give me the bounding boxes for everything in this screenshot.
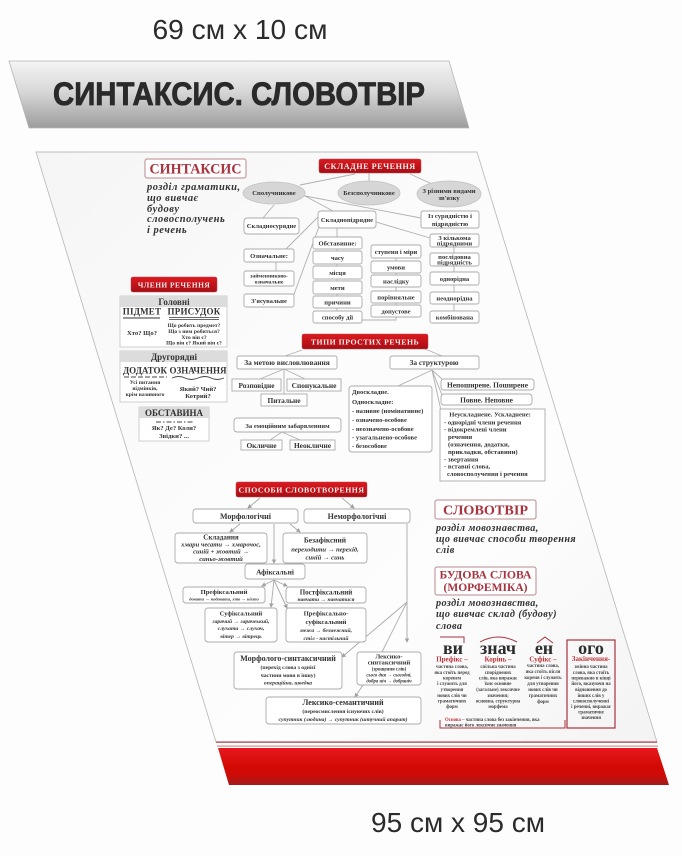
morpheme: root: спільна частина	[480, 665, 516, 670]
morpheme: root	[476, 637, 521, 710]
morpheme: prefix	[434, 637, 470, 710]
box: Неускладнене. Ускладнене	[440, 409, 545, 481]
definition: syntax: словосполучень	[147, 214, 225, 225]
box: Неускладнене. Ускладнене: (означення, додатки,	[448, 442, 510, 448]
box: однорідна	[430, 272, 479, 285]
oval: З різними видами зв'язку: З різними видами	[422, 188, 476, 195]
box: послідовна підрядність	[430, 253, 479, 266]
size label: top banner: 69 см х 10 см	[152, 14, 328, 45]
box: Безафіксний: переходити → перехід,	[291, 546, 359, 554]
definition: morphemics	[435, 598, 557, 632]
box: За емоційним забарвленням	[234, 418, 341, 432]
box: structure types list: - називне (номінативне)	[352, 408, 423, 415]
box: structure types list: - означено-особове	[352, 417, 407, 424]
box: умови	[371, 261, 421, 273]
size label: main panel: 95 см х 95 см	[371, 807, 545, 838]
box: Префіксально-суфіксальний	[286, 608, 366, 642]
morpheme: prefix: граматичних	[438, 700, 467, 704]
box: умови: умови	[387, 264, 405, 272]
box: неоднорідна	[430, 292, 479, 304]
morpheme: prefix: ви	[443, 638, 463, 658]
box: ступеня і міри	[371, 245, 421, 258]
box: structure types list: - неозначено-особове	[352, 426, 414, 433]
box: Складнопідрядне	[318, 211, 376, 228]
box: Безафіксний: синій → синь	[306, 554, 344, 562]
box: Неускладнене. Ускладнене: - звертання	[444, 456, 479, 464]
box: Префіксально-суфіксальний: суфіксальний	[306, 619, 347, 626]
box: Неускладнене. Ускладнене: Неускладнене. Ускладнене:	[449, 412, 531, 418]
definition: word formation	[435, 523, 576, 556]
morpheme: prefix: утворення	[441, 688, 464, 693]
box: Складнопідрядне: Складнопідрядне	[321, 217, 373, 224]
definition: syntax: що вивчає	[147, 193, 199, 204]
box: Лексико-синтаксичний: сього дня → сьогодні,	[366, 674, 412, 678]
box: З кількома підрядними	[430, 234, 479, 248]
predicate column: ПРИСУДОК	[168, 306, 221, 316]
subject column: Хто? Що?	[127, 330, 157, 337]
morpheme: prefix: коренем	[443, 676, 462, 682]
morpheme: suffix: для утворення	[527, 682, 559, 687]
box: Постфіксальний: Постфіксальний	[300, 588, 352, 596]
morpheme: prefix: Префікс –	[436, 656, 468, 664]
box: Означальне	[244, 249, 294, 262]
panel: secondary sentence parts	[120, 351, 227, 402]
oval: Сполучникове: Сполучникове	[252, 190, 296, 197]
box: ступеня і міри: ступеня і міри	[375, 249, 417, 256]
box: З'ясувальне	[244, 294, 294, 307]
box: Префіксально-суфіксальний: межа → безмежний,	[299, 627, 352, 634]
main panel	[36, 152, 669, 785]
box: часу	[313, 251, 362, 264]
object column: крім називного	[126, 392, 165, 398]
definition: syntax: і речень	[147, 225, 187, 236]
box: місця: місця	[329, 270, 346, 277]
connector lines: complex sentence	[263, 173, 454, 320]
definition: morphemics: слова	[436, 621, 462, 632]
box: Складання: синій + жовтий →	[193, 548, 249, 556]
box: Морфолого-синтаксичний: (перехід слова з однієї	[261, 664, 316, 671]
morpheme: suffix: кореня і служить	[524, 676, 562, 681]
morpheme: suffix: ен	[535, 638, 553, 658]
box: займенниково-означальне: означальне	[255, 280, 284, 286]
box: Непоширене. Поширене: Непоширене. Поширене	[447, 380, 529, 390]
morpheme: root: споріднених	[485, 671, 512, 676]
box: Афіксальні: Афіксальні	[256, 568, 294, 576]
definition: syntax: будову	[147, 204, 180, 215]
box: допустове	[371, 305, 421, 317]
box: комбінована: комбінована	[436, 314, 474, 322]
oval: Сполучникове	[243, 182, 305, 204]
box: structure types list: - узагальнено-особове	[352, 434, 417, 442]
box: Розповідне	[232, 379, 281, 391]
box: наслідку	[371, 275, 421, 287]
box: Постфіксальний	[286, 587, 366, 603]
box: Неокличне: Неокличне	[294, 441, 332, 450]
morpheme: suffix: Суфікс –	[529, 656, 557, 664]
morpheme: prefix: частина слова,	[436, 665, 469, 670]
morpheme: suffix: яка стоїть після	[526, 670, 561, 675]
predicate column: Що з ним робиться?	[168, 328, 220, 335]
header: Члени речення: ЧЛЕНИ РЕЧЕННЯ	[138, 280, 210, 290]
attribute column: Котрий?	[185, 393, 211, 400]
header: Типи простих речень: ТИПИ ПРОСТИХ РЕЧЕНЬ	[311, 338, 419, 346]
definition: word formation: розділ мовознавства,	[435, 523, 539, 534]
morpheme: ending: слова, яка стоїть	[573, 671, 610, 676]
box: Неморфологічні	[304, 509, 410, 523]
morpheme: root: Корінь –	[484, 656, 512, 664]
box: способу дії: способу дії	[322, 314, 353, 322]
oval: Безсполучникове: Безсполучникове	[343, 190, 395, 197]
box: Розповідне: Розповідне	[238, 381, 275, 390]
box: Окличне	[241, 440, 282, 450]
box: structure types list: Двоскладне.	[352, 389, 389, 396]
header: Способи словотворення	[236, 482, 367, 497]
box: Неускладнене. Ускладнене: - однорідні члени речення	[444, 420, 522, 426]
box: Префіксально-суфіксальний: стіл - настільний	[304, 635, 348, 642]
box: Морфолого-синтаксичний: частини мови в іншу)	[261, 672, 316, 679]
oval: З різними видами зв'язку: зв'язку	[438, 195, 460, 202]
morpheme: ending: значення	[581, 716, 601, 721]
box: За структурою	[390, 356, 479, 369]
box: Суфіксальний: вітер → вітрець	[220, 634, 262, 640]
morpheme: root: знач	[480, 638, 516, 658]
header: Типи простих речень	[302, 334, 428, 349]
predicate column: Хто він є?	[181, 335, 207, 341]
box: Безафіксний: Безафіксний	[304, 536, 347, 544]
morpheme: prefix: нових слів чи	[437, 694, 467, 699]
box: допустове: допустове	[381, 308, 411, 316]
morpheme: suffix	[524, 637, 562, 705]
box: Неускладнене. Ускладнене: словосполучення і речення	[447, 471, 528, 478]
predicate column: Що робить предмет?	[168, 322, 221, 329]
box: structure types list: - безособове	[352, 443, 387, 450]
box: Постфіксальний: навчати → навчатися	[298, 597, 355, 603]
box: Лексико-синтаксичний: (зрощення слів)	[372, 668, 407, 672]
box: Лексико-синтаксичний: добра ніч → добраніч	[366, 680, 412, 684]
subject column	[123, 306, 161, 337]
morpheme: ending: ого	[578, 638, 604, 658]
object column: ДОДАТОК	[123, 366, 167, 376]
box: Лексико-синтаксичний	[357, 652, 421, 685]
heading: Будова слова (морфеміка): (МОРФЕМІКА)	[444, 582, 528, 594]
attribute column: Який? Чий?	[180, 386, 216, 393]
morpheme: prefix: форм	[446, 705, 459, 710]
box: Префіксальний: довати → подавати, хто → ніхто	[189, 596, 259, 602]
box: Лексико-синтаксичний: синтаксичний	[368, 660, 411, 666]
box: часу: часу	[331, 255, 345, 262]
attribute column	[170, 366, 227, 400]
header: Члени речення	[131, 277, 217, 292]
box: Префіксальний: Префіксальний	[201, 589, 248, 596]
decorative stripes and red footer band	[216, 742, 669, 785]
definition: morphemics: розділ мовознавства,	[435, 598, 539, 609]
box: Морфолого-синтаксичний: Морфолого-синтаксичний	[240, 654, 336, 663]
box: Суфіксальний: гарячий → гарячеький,	[213, 618, 269, 625]
box: З кількома підрядними: підрядними	[437, 240, 472, 248]
morpheme: ending: переважно в кінці	[571, 676, 611, 682]
box: Неускладнене. Ускладнене: - відокремлені члени	[444, 426, 507, 434]
top banner	[9, 61, 469, 128]
box: Суфіксальний: слухати → слухач,	[218, 626, 264, 632]
box: Лексико-семантичний	[266, 697, 421, 724]
box: порівняльне: порівняльне	[377, 294, 415, 302]
box: однорідна: однорідна	[440, 276, 470, 283]
box: Складання: синьо-жовтий	[199, 556, 243, 563]
morpheme: prefix: і служить для	[437, 682, 467, 687]
box: Афіксальні	[245, 564, 305, 579]
morpheme: suffix: форм	[537, 700, 550, 705]
morpheme: root: їхнє основне	[485, 682, 511, 687]
box: Із сурядністю і підрядністю	[421, 211, 479, 228]
heading: Синтаксис: СИНТАКСИС	[150, 162, 242, 178]
morpheme: ending	[567, 638, 615, 728]
object column: відмінків,	[132, 386, 158, 392]
connector lines: simple sentence types	[260, 349, 442, 440]
definition: word formation: що вивчає способи творення	[436, 534, 576, 545]
panel: main sentence parts	[120, 296, 227, 347]
panel: adverbial	[139, 407, 209, 441]
adverbial questions: Звідки? ...	[159, 433, 189, 440]
morpheme: ending: інших слів у	[578, 694, 605, 699]
box: порівняльне	[371, 291, 421, 303]
heading: Словотвір: СЛОВОТВІР	[443, 504, 528, 518]
box: Неускладнене. Ускладнене: - вставні слова,	[444, 464, 490, 470]
box: Обставинне: Обставинне:	[318, 240, 357, 248]
word stem note	[440, 718, 565, 728]
word stem note: Основа – частина слова без закінчення, яка	[445, 718, 540, 723]
heading: Будова слова (морфеміка)	[435, 567, 536, 595]
box: Питальне	[261, 394, 307, 406]
box: Спонукальне	[287, 379, 341, 391]
morpheme: suffix: частина слова,	[527, 664, 560, 669]
morpheme: ending: Закінчення-	[572, 655, 611, 663]
predicate column	[166, 306, 222, 346]
box: Лексико-семантичний: Лексико-семантичний	[302, 698, 384, 707]
box: мети: мети	[330, 285, 345, 292]
box: За структурою: За структурою	[409, 358, 459, 367]
subject column: ПІДМЕТ	[123, 306, 161, 316]
morpheme: ending: словосполученні	[573, 700, 610, 704]
box: Префіксально-суфіксальний: Префіксально-	[304, 610, 348, 618]
box: Морфолого-синтаксичний	[234, 652, 342, 689]
box: Складносурядне: Складносурядне	[247, 223, 296, 230]
box: місця	[313, 266, 362, 279]
morpheme: ending: відношення до	[575, 688, 608, 693]
morpheme: ending: його, вказуючи на	[571, 682, 611, 687]
definition: morphemics: що вивчає склад (будову)	[436, 609, 557, 620]
heading: Будова слова (морфеміка): БУДОВА СЛОВА	[440, 570, 532, 582]
header: Способи словотворення: СПОСОБИ СЛОВОТВОРЕННЯ	[239, 486, 364, 494]
box: Суфіксальний	[205, 608, 277, 642]
oval: Безсполучникове	[338, 181, 400, 205]
box: Спонукальне: Спонукальне	[292, 381, 337, 390]
definition: word formation: слів	[436, 545, 455, 556]
object column: Усі питання	[130, 380, 160, 386]
object column	[123, 366, 167, 398]
box: За емоційним забарвленням: За емоційним забарвленням	[245, 423, 330, 430]
morpheme: suffix: граматичних	[529, 694, 558, 699]
morpheme: root: слів, яка виражає	[479, 676, 518, 682]
box: причини	[313, 296, 362, 308]
banner title: СИНТАКСИС. СЛОВОТВІР	[53, 76, 425, 112]
box: Морфологічні: Морфологічні	[220, 512, 272, 521]
box: Лексико-семантичний: супутник (людина) → супутник (штучний апарат)	[279, 716, 408, 723]
attribute column: ОЗНАЧЕННЯ	[170, 366, 227, 376]
connector arrows: word formation	[230, 498, 407, 697]
box: Морфолого-синтаксичний: операційна, шведка	[264, 680, 312, 686]
box: Безафіксний	[283, 533, 367, 563]
box: Лексико-синтаксичний: Лексико-	[375, 654, 403, 660]
box: неоднорідна: неоднорідна	[436, 296, 473, 302]
box: займенниково-означальне	[244, 271, 294, 286]
box: Складання: Складання	[203, 534, 239, 542]
morpheme: ending: і реченні, виражає	[571, 705, 612, 710]
box: Із сурядністю і підрядністю: Із сурядністю і	[428, 213, 472, 220]
header: Складне речення: СКЛАДНЕ РЕЧЕННЯ	[324, 162, 416, 171]
morpheme: root: (загальне) лексичне	[476, 688, 520, 693]
oval: З різними видами зв'язку	[417, 181, 481, 207]
box: Морфологічні	[193, 509, 298, 523]
box: Неморфологічні: Неморфологічні	[328, 512, 387, 521]
panel header: Обставина: ОБСТАВИНА	[145, 408, 203, 418]
box: Складання: хмари чесати → хмарочос,	[180, 542, 261, 548]
box: Неускладнене. Ускладнене: речення	[448, 434, 473, 441]
morpheme: ending: граматичне	[578, 710, 604, 716]
box: Повне. Неповне	[441, 394, 532, 405]
panel header: Другорядні: Другорядні	[151, 352, 198, 362]
box: послідовна підрядність: підрядність	[437, 260, 472, 266]
predicate column: Що він є? Який він є?	[166, 340, 222, 346]
box: послідовна підрядність: послідовна	[438, 254, 472, 261]
box: Префіксальний	[183, 587, 265, 603]
box: Окличне: Окличне	[246, 441, 277, 450]
panel header: Головні: Головні	[158, 297, 190, 307]
morpheme: suffix: нових слів чи	[528, 688, 558, 693]
box: За метою висловлювання: За метою висловлювання	[244, 358, 330, 367]
box: За метою висловлювання	[237, 356, 337, 369]
morpheme: ending: змінна частина	[574, 665, 608, 670]
box: комбінована	[430, 311, 479, 323]
morpheme: root: значення;	[487, 694, 509, 699]
box: Лексико-семантичний: (переосмислення існуючих слів)	[302, 708, 384, 715]
box: structure types list	[349, 386, 432, 452]
header: Складне речення	[319, 159, 421, 173]
box: Питальне: Питальне	[267, 396, 301, 405]
box: Із сурядністю і підрядністю: підрядністю	[432, 221, 468, 228]
box: займенниково-означальне: займенниково-	[250, 272, 288, 280]
box: structure types list: Односкладне:	[352, 399, 393, 406]
box: Неускладнене. Ускладнене: прикладки, обставини)	[448, 449, 518, 456]
adverbial questions	[152, 425, 196, 440]
box: Повне. Неповне: Повне. Неповне	[460, 396, 514, 404]
morpheme: prefix: яка стоїть перед	[434, 671, 470, 676]
heading: Словотвір	[435, 500, 536, 519]
definition: syntax: розділ граматики,	[146, 182, 241, 193]
box: З'ясувальне: З'ясувальне	[251, 298, 287, 305]
box: причини: причини	[324, 300, 351, 306]
definition: syntax	[146, 182, 241, 236]
box: Означальне: Означальне:	[250, 253, 288, 260]
box: мети	[313, 281, 362, 294]
box: Суфіксальний: Суфіксальний	[220, 610, 263, 618]
box: Складносурядне	[244, 218, 299, 234]
morpheme: root: основна, структурна	[476, 700, 521, 704]
word stem note: виражає його лексичне значення	[445, 724, 517, 728]
box: наслідку: наслідку	[383, 278, 410, 286]
adverbial questions: Як? Де? Коли?	[152, 425, 196, 432]
box: З кількома підрядними: З кількома	[438, 235, 471, 242]
box: Складання	[175, 533, 267, 563]
box: способу дії	[313, 311, 362, 323]
box: Обставинне	[313, 237, 362, 249]
morpheme: root: морфема	[488, 705, 508, 710]
